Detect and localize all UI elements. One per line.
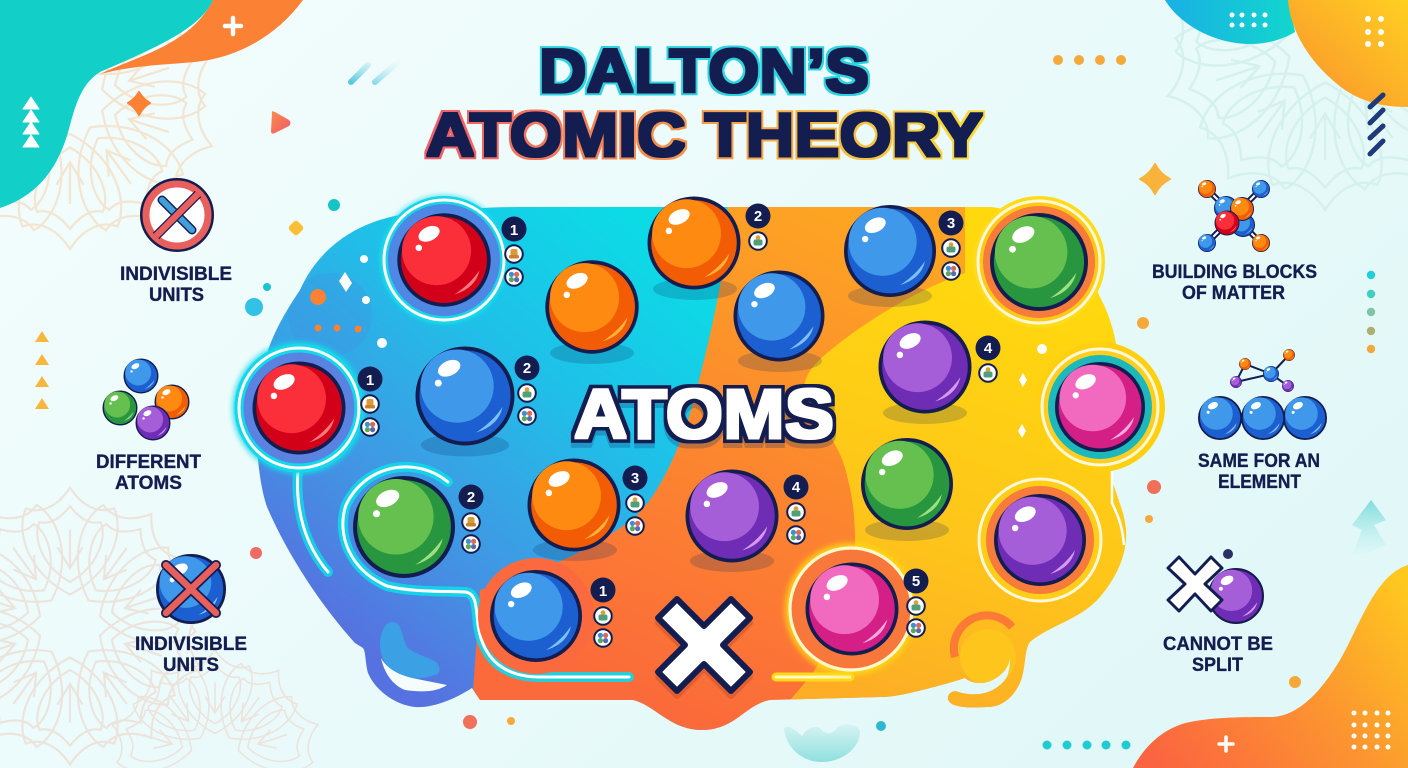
purple sphere xyxy=(880,322,970,412)
icon: molecule cluster xyxy=(1198,180,1270,252)
blue streaks xyxy=(351,62,398,82)
orange sphere xyxy=(529,460,619,550)
confetti right xyxy=(1018,344,1047,438)
white plus xyxy=(225,18,241,34)
orange sphere xyxy=(547,262,637,352)
atom: purple right xyxy=(880,322,1000,424)
number badge 1 xyxy=(358,366,382,436)
panel: indivisible units top xyxy=(120,180,232,306)
atom: orange centre lower xyxy=(529,460,648,561)
icon: big white cross xyxy=(658,599,750,696)
icon: prohibited bar xyxy=(142,180,212,250)
gold star xyxy=(1140,164,1170,194)
neon connector: yellow right xyxy=(776,672,850,682)
blue sphere xyxy=(492,572,580,660)
blue sphere xyxy=(417,348,513,444)
atom: green ringed top right xyxy=(973,196,1105,328)
label: SAME FOR AN xyxy=(1198,451,1320,472)
green sphere xyxy=(863,440,951,528)
atom: pink bottom ringed xyxy=(785,543,928,675)
label: UNITS xyxy=(163,655,219,676)
mandala pattern: top left xyxy=(0,0,228,251)
panel: same for an element xyxy=(1198,349,1326,493)
title xyxy=(426,37,983,169)
number badge 1 xyxy=(502,216,526,286)
number badge 1: 1 xyxy=(366,372,374,389)
label: UNITS xyxy=(149,285,204,306)
orange-yellow blob xyxy=(1133,565,1408,768)
pink sphere xyxy=(1057,364,1143,450)
central atoms blob xyxy=(240,190,1140,735)
number badge 5: 5 xyxy=(912,573,920,590)
yellow-orange blob xyxy=(1288,0,1408,107)
green sphere xyxy=(355,478,453,576)
green sphere xyxy=(992,215,1086,309)
teal wave xyxy=(0,0,213,208)
icon: identical atoms with molecule xyxy=(1199,349,1326,439)
panel: cannot be split xyxy=(1163,549,1273,676)
number badge 5 xyxy=(904,568,928,637)
number badge 4: 4 xyxy=(792,479,801,496)
corner blob: bottom right xyxy=(1133,565,1408,768)
icon: cross and atom xyxy=(1168,549,1263,623)
label: SPLIT xyxy=(1192,655,1243,676)
icon: four coloured atoms xyxy=(103,359,189,440)
background dots xyxy=(328,199,340,211)
number badge 4: 4 xyxy=(984,340,993,357)
teal bowl xyxy=(784,724,860,762)
white dots xyxy=(1230,12,1384,47)
yellow zone xyxy=(790,207,1126,708)
number badge 2: 2 xyxy=(523,360,531,377)
atom: blue bottom on orange halo xyxy=(478,558,616,674)
mandala pattern: top right xyxy=(1151,0,1408,212)
panel: indivisible units bottom xyxy=(135,555,247,676)
blue zone xyxy=(240,190,740,730)
pink sphere xyxy=(807,564,897,654)
atom: orange top xyxy=(649,198,770,300)
number badge 1: 1 xyxy=(510,222,518,239)
neon connector: cyan left xyxy=(297,467,629,677)
blue sphere xyxy=(846,207,934,295)
mandala pattern: bottom centre left xyxy=(101,649,329,768)
atom: blue left centre xyxy=(417,348,540,457)
mandala pattern: bottom left xyxy=(0,486,217,766)
atom: blue centre xyxy=(735,272,823,372)
play triangle xyxy=(271,111,290,134)
label: ELEMENT xyxy=(1218,472,1301,493)
navy stripes xyxy=(1370,95,1383,154)
red sphere xyxy=(254,363,344,453)
number badge 2: 2 xyxy=(754,208,762,225)
purple sphere xyxy=(996,496,1084,584)
panel: building blocks of matter xyxy=(1152,180,1317,304)
orange star xyxy=(128,92,150,115)
title line 1: DALTON’S xyxy=(539,37,869,105)
bottom-left lobe accent xyxy=(380,622,439,678)
white connector right xyxy=(1112,462,1124,545)
white crescent left xyxy=(381,658,447,691)
orange sphere xyxy=(649,198,739,288)
orange zone xyxy=(470,200,1000,735)
number badge 2: 2 xyxy=(467,489,475,506)
corner blob: top left xyxy=(0,0,303,208)
white plus xyxy=(1219,737,1233,751)
bottom-right yellow disc xyxy=(960,629,1016,685)
label: ATOMS xyxy=(115,473,182,494)
number badge 3: 3 xyxy=(947,215,955,232)
atom: green left lower xyxy=(355,478,484,576)
atom: purple centre lower xyxy=(687,471,808,572)
icon: crossed atom xyxy=(157,555,225,623)
teal tree xyxy=(1352,500,1386,556)
atom: orange upper xyxy=(547,262,637,364)
corner blob: top right xyxy=(1165,0,1408,154)
white dots xyxy=(1352,710,1390,750)
neon line around green atom to x xyxy=(343,467,629,677)
label: DIFFERENT xyxy=(96,452,201,473)
bottom-right orange arc xyxy=(954,615,1012,657)
teal-blue blob xyxy=(1165,0,1295,44)
atom: green lower right xyxy=(863,440,951,541)
number badge 3: 3 xyxy=(631,470,639,487)
label: INDIVISIBLE xyxy=(135,634,247,655)
heading: ATOMS: ATOMS xyxy=(574,375,834,453)
label: CANNOT BE xyxy=(1163,634,1273,655)
atom: purple ringed lower right xyxy=(979,479,1101,601)
blue sphere xyxy=(735,272,823,360)
atom: pink ringed right xyxy=(1035,342,1165,472)
label: OF MATTER xyxy=(1182,283,1285,304)
title line 2: ATOMIC THEORY xyxy=(426,101,983,169)
number badge 1: 1 xyxy=(599,583,607,600)
red sphere xyxy=(399,215,489,305)
purple sphere xyxy=(687,471,777,561)
darker blue patch xyxy=(288,273,372,357)
orange wave xyxy=(100,0,303,74)
confetti left xyxy=(339,255,387,348)
label: BUILDING BLOCKS xyxy=(1152,262,1317,283)
panel: different atoms xyxy=(96,359,201,494)
white triangles xyxy=(23,97,39,147)
atom: top red ringed xyxy=(380,196,526,324)
orange dots xyxy=(314,324,362,332)
label: INDIVISIBLE xyxy=(120,264,232,285)
atom: red left ringed xyxy=(233,342,382,474)
orange triangles xyxy=(35,331,49,409)
atom: blue top right xyxy=(846,207,964,307)
